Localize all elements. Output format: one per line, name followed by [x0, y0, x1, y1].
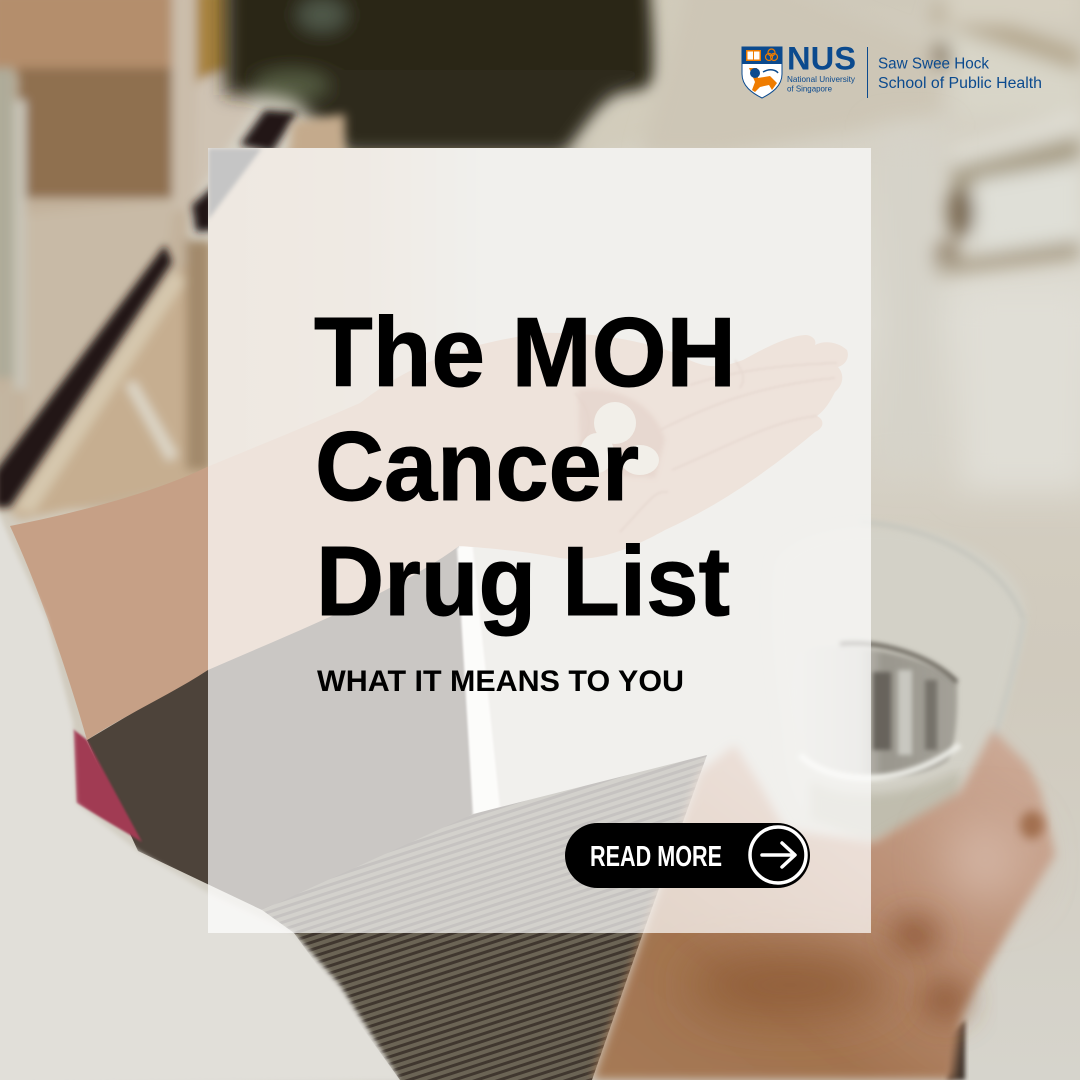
right hand: [592, 730, 1055, 1080]
translucent white panel: [208, 148, 871, 933]
dark seat and cushion: [87, 540, 500, 910]
sitting person: arm, lap, cushion: [0, 333, 965, 1080]
glass of water and right hand: [592, 522, 1055, 1080]
title: Cancer: [315, 411, 639, 521]
university name: National University: [787, 74, 856, 84]
plant at top centre: [225, 0, 695, 165]
ribbed skirt: [262, 755, 707, 1080]
forearm and open hand holding pills: [10, 333, 848, 740]
read more button: [565, 823, 810, 888]
red garment: [73, 729, 142, 842]
title: The MOH: [314, 297, 736, 407]
divider: [867, 47, 868, 98]
cream sleeve in foreground: [0, 505, 400, 1080]
logo: NUS Saw Swee Hock School of Public Health: [742, 40, 1042, 98]
logo: NUS Saw Swee Hock School of Public Health: of Singapore: [787, 84, 832, 94]
title: [314, 297, 736, 636]
read more button: READ MORE: [590, 841, 722, 873]
icon: NUS shield: [742, 47, 782, 98]
chair legs at top right: [640, 0, 1080, 490]
shelf and cabinet at top left: [0, 0, 298, 520]
NUS wordmark: NUS: [787, 40, 856, 76]
icon: arrow in circle: [750, 827, 806, 883]
title: Drug List: [316, 526, 730, 636]
pills: [580, 402, 659, 475]
finger creases: [575, 360, 837, 532]
background inside panel area: [208, 148, 578, 462]
subtitle: WHAT IT MEANS TO YOU: [317, 665, 684, 698]
school name: Saw Swee Hock: [878, 56, 989, 72]
glass: [772, 522, 1025, 842]
logo: NUS Saw Swee Hock School of Public Health: School of Public Health: [878, 75, 1042, 92]
